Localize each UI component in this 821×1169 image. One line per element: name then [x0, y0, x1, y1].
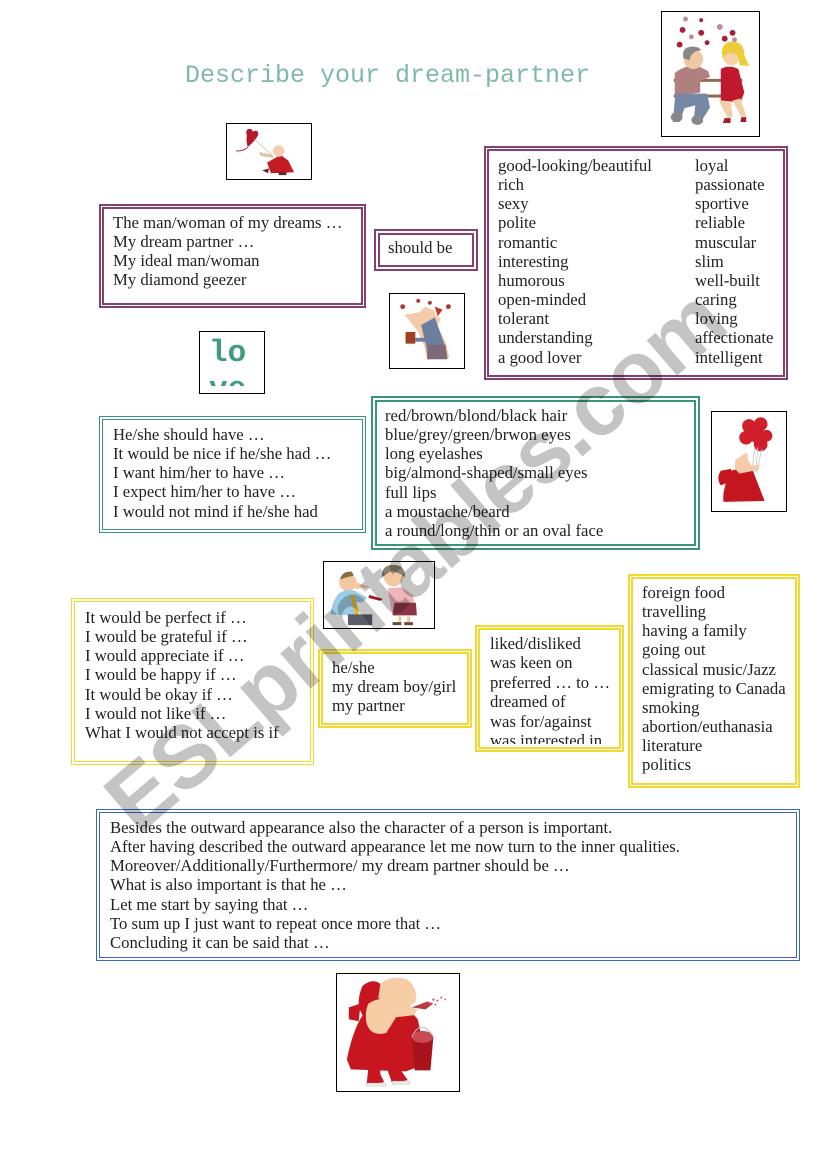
text: adjectives column 1: good-looking/beautiful rich sexy polite romantic interesting humorous open-minded tolerant understanding a good lover [498, 156, 652, 367]
text: should have phrases: He/she should have … It would be nice if he/she had … I want him/her to have … I expect him/her to have … I would not mind if he/she had [113, 425, 331, 521]
image: love letters [199, 331, 265, 394]
panel: should have phrases [99, 416, 366, 533]
text: adjectives column 2: loyal passionate sportive reliable muscular slim well-built caring loving affectionate intelligent [695, 156, 773, 367]
panel: adjectives [484, 146, 788, 380]
image: girl with balloons [711, 411, 787, 512]
text: conditional phrases: It would be perfect if … I would be grateful if … I would appreciate if … I would be happy if … It would be okay if … I would not like if … What I would not accept is if [85, 608, 279, 742]
text: pronouns: he/she my dream boy/girl my partner [332, 658, 456, 715]
image: girl blowing hearts [336, 973, 460, 1092]
image: man kneeling before woman [323, 561, 435, 629]
image: girl running with heart kite [226, 123, 312, 180]
panel: appearance [371, 396, 700, 550]
panel: interests [628, 574, 800, 788]
text: appearance: red/brown/blond/black hair blue/grey/green/brwon eyes long eyelashes big/almond-shaped/small eyes full lips a moustache/beard a round/long/thin or an oval face [385, 406, 603, 540]
text: interests: foreign food travelling having a family going out classical music/Jazz emigrating to Canada smoking abortion/euthanasia literature politics [642, 583, 786, 774]
watermark: ESLprintables.com [86, 269, 743, 851]
panel: likes verbs [475, 625, 624, 752]
panel: conditional phrases [71, 598, 314, 765]
image: couple on bench [661, 11, 760, 137]
text: should be: should be [388, 238, 452, 257]
panel: should be [374, 229, 478, 271]
text: linking phrases: Besides the outward appearance also the character of a person is important. After having described the outward appearance let me now turn to the inner qualities. Moreover/Additionally/Furthermore/ my dream partner should be … What is also important is that he … Let me start by saying that … To sum up I just want to repeat once more that … Concluding it can be said that … [110, 818, 680, 952]
text: subject phrases: The man/woman of my dreams … My dream partner … My ideal man/woman My diamond geezer [113, 213, 342, 289]
panel: subject phrases [99, 204, 366, 308]
image: man with gift [389, 293, 465, 369]
panel: pronouns [318, 649, 472, 728]
panel: linking phrases [96, 809, 800, 961]
title: Describe your dream-partner [185, 61, 590, 90]
